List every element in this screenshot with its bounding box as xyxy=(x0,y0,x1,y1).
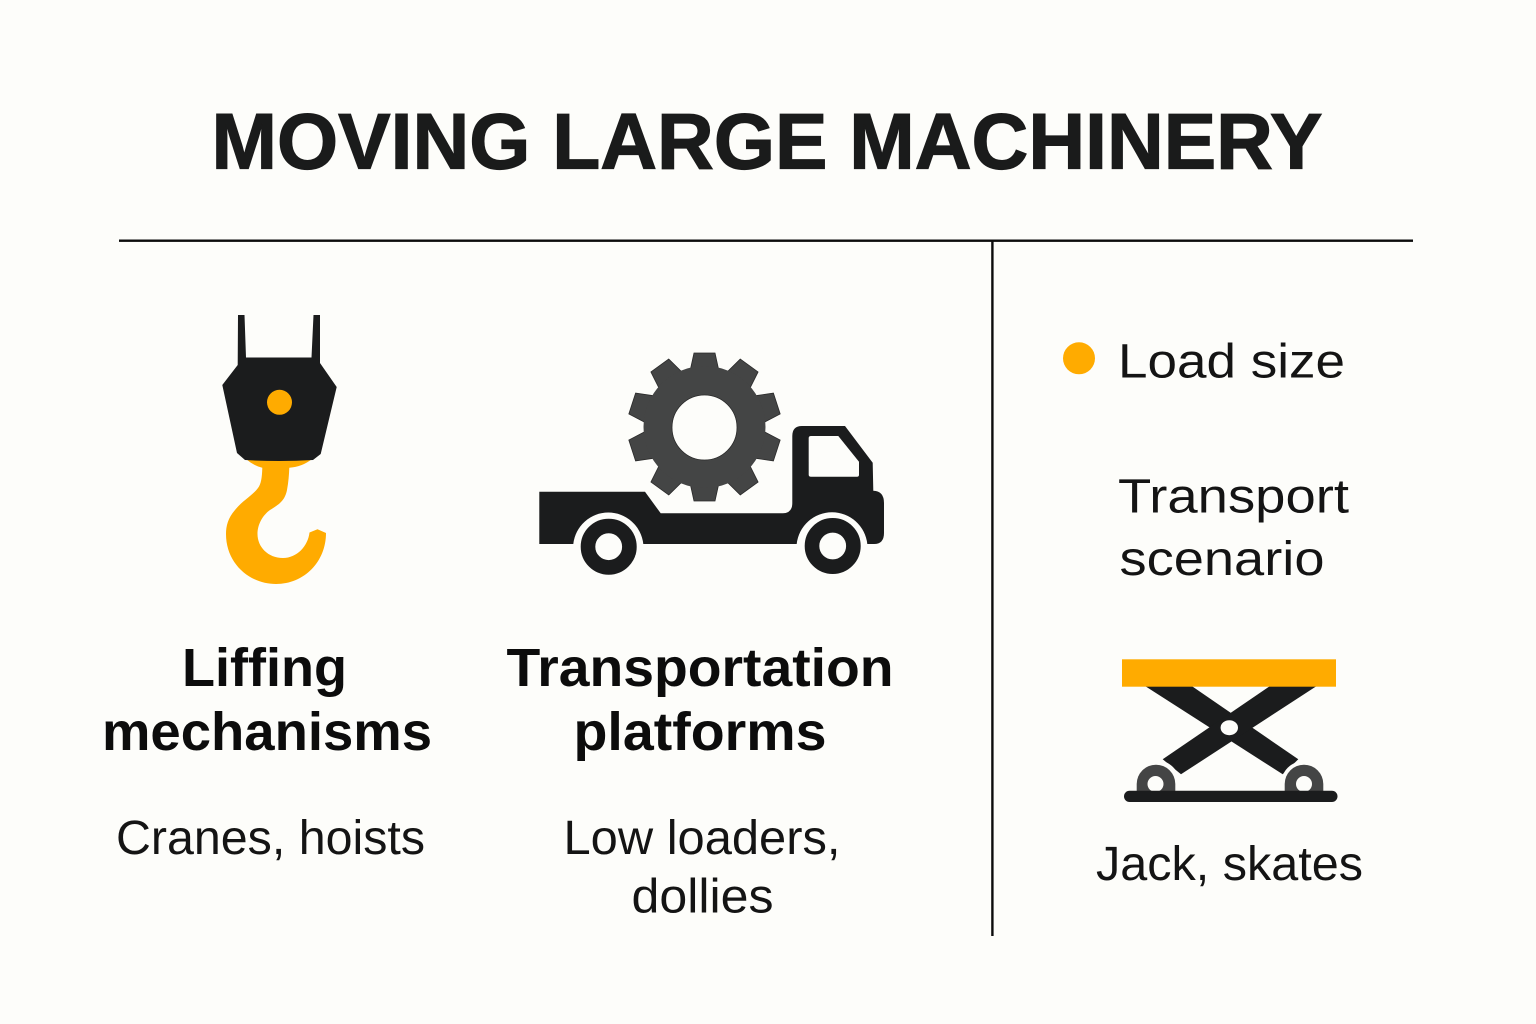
icon: scissor lift xyxy=(1122,659,1338,808)
heading: lifting mechanisms: mechanisms xyxy=(102,702,432,762)
panel: lifting mechanisms xyxy=(102,315,432,865)
heading: lifting mechanisms: Liffing xyxy=(182,638,347,698)
legend: load size: Load size xyxy=(1118,336,1345,389)
panel: transport scenario xyxy=(1063,336,1363,891)
text: cranes, hoists: Cranes, hoists xyxy=(116,812,425,865)
title: MOVING LARGE MACHINERY xyxy=(212,96,1322,186)
icon: crane hook xyxy=(222,315,337,584)
text: jack, skates: Jack, skates xyxy=(1096,838,1363,891)
panel: transportation platforms xyxy=(506,353,894,923)
text: transport scenario: Transport xyxy=(1118,471,1349,524)
text: low loaders, dollies xyxy=(564,812,840,923)
icon: flatbed truck xyxy=(539,426,884,567)
text: transport scenario xyxy=(1118,471,1349,586)
text: transport scenario: scenario xyxy=(1120,533,1324,586)
heading: transportation platforms: Transportation xyxy=(506,638,894,698)
heading: transportation platforms xyxy=(506,638,894,762)
heading: lifting mechanisms xyxy=(102,638,432,762)
icon: gear xyxy=(628,353,781,501)
text: low loaders, dollies: Low loaders, xyxy=(564,812,840,865)
heading: transportation platforms: platforms xyxy=(574,702,826,762)
text: low loaders, dollies: dollies xyxy=(632,870,774,923)
